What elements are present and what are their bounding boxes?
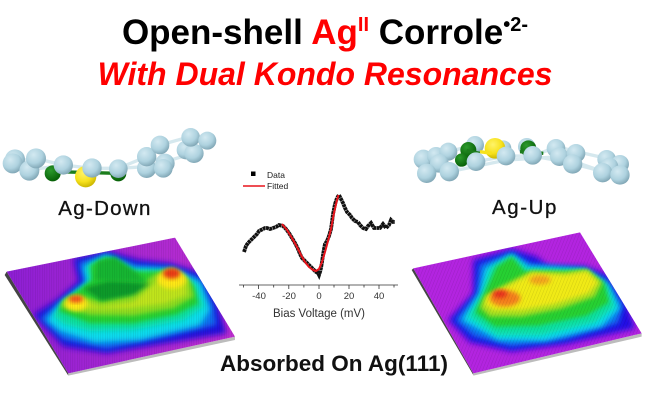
label: Ag-Down: Ag-Down [58,197,152,220]
axis title: Bias Voltage (mV) [273,308,365,320]
molecule: Ag-Up [414,136,630,185]
caption: Absorbed On Ag(111) [220,351,448,376]
x axis [239,285,398,289]
chart: Bias voltage spectrum [239,170,398,320]
chart: Bias voltage spectrum: -40 [252,291,266,302]
label: Ag-Up: Ag-Up [492,196,558,219]
title: Corrole [369,13,503,52]
legend [243,170,289,191]
chart: Bias voltage spectrum: 20 [344,291,354,302]
fitted curve [282,195,338,271]
STM surface: Ag-Down [4,238,235,376]
title: II [358,14,369,36]
molecule: Ag-Down [3,128,216,187]
chart: Bias voltage spectrum: 40 [374,291,384,302]
title: Open-shell Ag [122,13,358,52]
title: •2- [503,14,528,36]
subtitle: With Dual Kondo Resonances [98,56,552,92]
chart: Bias voltage spectrum: -20 [282,291,296,302]
chart: Bias voltage spectrum: 0 [316,291,322,302]
legend: Fitted [267,181,289,191]
data points [244,195,395,275]
STM surface: Ag-Up [412,232,642,376]
legend: Data [267,170,285,180]
